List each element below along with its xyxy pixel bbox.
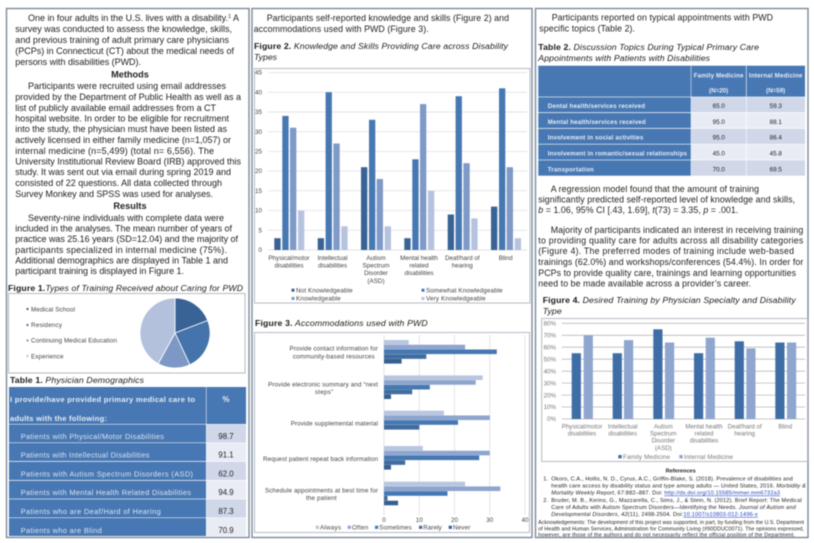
y axis labels: 45	[255, 70, 262, 76]
text block: introduction: 1	[228, 14, 231, 20]
heading: figure 4: Figure 4. Desired Training by Physician Specialty and Disability	[543, 295, 796, 305]
x axis category labels: Physical/motor	[268, 255, 310, 262]
table 2: discussion topics: 59.3	[770, 103, 782, 110]
table 2: discussion topics: Involvement in social activities	[548, 135, 644, 142]
table 2: discussion topics: (N=20)	[709, 88, 728, 94]
category labels: Request patient repeat back information	[263, 456, 378, 463]
x axis category labels: Autism	[654, 423, 673, 430]
bars: provide contact information	[384, 340, 497, 364]
text block: knowledge and accommodations intro	[254, 13, 509, 34]
legend: frequency: Sometimes	[379, 525, 412, 532]
text block: references	[543, 476, 806, 518]
category labels: Provide electronic summary and “next	[268, 382, 378, 388]
text block: methods: study. It was sent out via email during spring 2019 and	[15, 167, 231, 177]
x axis category labels: related	[409, 262, 429, 270]
bars: somewhat knowledgeable	[282, 88, 505, 250]
legend: training types: Medical School	[31, 306, 75, 313]
x axis category labels	[562, 423, 793, 452]
x axis labels: 0	[382, 517, 386, 524]
table 1: physician demographics: 94.9	[218, 488, 234, 497]
table 2: discussion topics: 86.4	[770, 135, 782, 142]
heading: figure 3: Figure 3. Accommodations used with PWD	[255, 318, 428, 328]
panel: middle column	[252, 8, 532, 538]
text block: knowledge and accommodations intro: accommodations used with PWD (Figure 3).	[254, 24, 429, 34]
text block: methods	[15, 81, 241, 199]
chart: figure 4 grouped bars	[542, 318, 808, 462]
y axis labels: 60%	[544, 344, 556, 351]
text block: methods: internal medicine (n=5,499) (total n= 6,556). The	[15, 146, 214, 156]
category labels: steps”	[315, 389, 333, 396]
x axis labels: 40	[521, 517, 529, 524]
table 2: discussion topics: (N=59)	[766, 88, 785, 94]
text block: results: practice was 25.16 years (SD=12.04) and the majority of	[15, 234, 238, 244]
table 1: physician demographics: 62.0	[218, 470, 234, 478]
table 2: discussion topics: Transportation	[548, 167, 594, 174]
y axis labels: 40	[255, 89, 262, 96]
table 2: discussion topics: Involvement in romantic/sexual relationships	[548, 151, 688, 158]
x axis category labels: hearing	[452, 262, 473, 270]
text block: references: Bruder, M. B., Kerins, G., Mazzarella, C., Sims, J., & Stein, N. (2012). Brief Report: The Medical	[551, 498, 802, 504]
text block: introduction: survey was conducted to assess the knowledge, skills,	[15, 24, 232, 34]
y axis labels: 80%	[544, 320, 556, 328]
y axis labels	[255, 70, 262, 254]
y axis labels: 20	[255, 168, 262, 175]
text block: preferred training: Majority of participants indicated an interest in receiving training	[551, 225, 803, 235]
x axis category labels: disabilities	[568, 431, 596, 438]
text block: methods: Survey Monkey and SPSS was used for analyses.	[15, 189, 213, 199]
heading: figure 1: Figure 1.Types of Training Received about Caring for PWD	[8, 283, 243, 293]
table 2: discussion topics: Family Medicine	[694, 72, 744, 80]
text block: introduction: and previous training of adult primary care physicians	[15, 35, 229, 45]
text block: introduction: A	[231, 13, 239, 23]
x axis category labels: disabilities	[404, 270, 434, 277]
x axis labels: 20	[451, 517, 458, 524]
legend: training types: Experience	[31, 354, 64, 360]
category labels: Schedule appointments at best time for	[265, 488, 378, 494]
heading: table 2: Appointments with Patients with Disabilities	[537, 53, 711, 63]
text block: methods: provided by the Department of Public Health as well as a	[15, 92, 241, 102]
panel: right column	[536, 8, 808, 539]
text block: results	[15, 213, 238, 276]
x axis category labels: Intellectual	[317, 255, 348, 262]
legend: specialty: Family Medicine	[623, 454, 671, 461]
table 1: physician demographics: I provide/have provided primary medical care to	[10, 395, 195, 404]
text block: preferred training: PCPs to provide quality care, trainings and learning opportunities	[538, 268, 797, 278]
table 1: physician demographics: Patients with Intellectual Disabilities	[21, 450, 150, 460]
heading: figure 4	[543, 295, 796, 316]
table 2: discussion topics: 69.5	[770, 167, 782, 174]
x axis labels	[382, 517, 529, 524]
legend: specialty	[618, 454, 734, 461]
legend: frequency: Never	[453, 525, 470, 532]
table 1: physician demographics: %	[223, 395, 230, 404]
text block: introduction: persons with disabilities (PWD).	[15, 57, 141, 67]
text block: references: Okoro, C.A., Hollis, N. D., Cyrus, A.C., Griffin-Blake, S. (2018). Prevalence of disabilities and	[551, 476, 793, 482]
text block: methods: hospital website. In order to be eligible for recruitment	[15, 114, 229, 124]
heading: figure 2: Figure 2. Knowledge and Skills Providing Care across Disability	[254, 41, 509, 51]
text block: methods: into the study, the physician must have been listed as	[15, 124, 227, 134]
y axis labels: 35	[255, 109, 262, 116]
text block: introduction: (PCPs) in Connecticut (CT) about the medical needs of	[15, 46, 234, 56]
x axis category labels: Spectrum	[650, 431, 677, 438]
text block: preferred training: need to be made available across a provider’s career.	[538, 278, 751, 288]
bars: not knowledgeable	[274, 167, 497, 250]
legend: knowledge levels: Not Knowledgeable	[296, 288, 353, 294]
y axis labels: 0%	[547, 416, 556, 423]
heading: results: Results	[113, 201, 147, 211]
bars: request patient repeat back	[384, 446, 490, 470]
panel: left column	[6, 8, 249, 538]
text block: methods: list of publicly available email addresses from a CT	[15, 103, 216, 113]
text block: methods: Participants were recruited using email addresses	[28, 81, 226, 91]
table 1: physician demographics: 87.3	[218, 507, 234, 516]
y axis labels: 50%	[544, 356, 556, 363]
table 1: physician demographics: 70.9	[218, 526, 234, 535]
text block: regression: significantly predicted self-reported level of knowledge and skills,	[538, 194, 795, 204]
x axis category labels	[268, 255, 513, 285]
table 1: physician demographics: Patients who are Blind	[21, 526, 102, 535]
x axis category labels: Blind	[499, 255, 513, 262]
heading: figure 4: Type	[543, 306, 562, 316]
text block: results: participant training is displayed in Figure 1.	[15, 266, 184, 276]
table 2: discussion topics	[538, 66, 805, 176]
legend: frequency: Often	[352, 525, 369, 532]
x axis category labels: disabilities	[274, 262, 304, 270]
x axis category labels: Autism	[366, 255, 386, 262]
x axis category labels: Physical/motor	[562, 423, 602, 430]
table 1: physician demographics: 91.1	[218, 450, 234, 460]
y axis labels: 15	[255, 188, 262, 195]
table 2: discussion topics: Internal Medicine	[749, 72, 803, 80]
text block: regression: A regression model found that the amount of training	[551, 184, 759, 194]
x axis category labels: Disorder	[652, 438, 675, 445]
table 2: discussion topics: 45.8	[770, 151, 782, 158]
legend: training types: Continuing Medical Education	[31, 338, 117, 345]
legend: training types	[26, 306, 117, 360]
text block: results: participants specialized in internal medicine (75%).	[15, 245, 227, 255]
x axis category labels: Intellectual	[608, 423, 637, 430]
y axis labels: 30	[255, 129, 262, 136]
legend: specialty: Internal Medicine	[684, 454, 734, 461]
heading: table 1: Table 1. Physician Demographics	[10, 375, 145, 385]
chart: figure 1 pie chart	[8, 294, 245, 373]
heading: figure 2: Types	[254, 52, 278, 62]
heading: table 2: Table 2. Discussion Topics During Typical Primary Care	[538, 42, 759, 52]
y axis labels: 40%	[544, 368, 556, 375]
heading: table 2	[537, 42, 759, 63]
x axis category labels: Disorder	[364, 270, 388, 277]
bars: internal medicine	[584, 335, 796, 419]
x axis category labels: Mental health	[400, 255, 438, 262]
y axis labels: 10%	[544, 404, 556, 411]
category labels: Provide supplemental material	[291, 420, 378, 428]
x axis category labels: disabilities	[318, 262, 347, 270]
table 2: discussion topics: 95.0	[713, 135, 725, 142]
table 2: discussion topics: Mental health/services received	[548, 119, 646, 126]
x axis category labels: related	[695, 431, 714, 438]
table 2: discussion topics: 65.0	[713, 103, 725, 110]
text block: acknowledgements: however, are those of the authors and do not necessarily reflect the official position of the Department.	[538, 533, 795, 539]
table 1: physician demographics: Patients with Physical/Motor Disabilities	[21, 432, 164, 441]
text block: references: health care access by disability status and type among adults — United States, 2016. Morbidity &	[551, 484, 806, 490]
text block: results: Additional demographics are displayed in Table 1 and	[15, 256, 228, 266]
text block: references: Developmental Disorders, 42(11), 2498-2504. Doi:10.1007/s10803-012-1496-x	[551, 512, 758, 518]
y axis labels: 10	[255, 208, 262, 215]
table 2: discussion topics: 45.0	[713, 151, 725, 158]
legend: knowledge levels	[292, 288, 503, 303]
legend: knowledge levels: Very Knowledgeable	[426, 296, 486, 303]
text block: references: 1.	[543, 476, 548, 482]
x axis category labels: Deaf/hard of	[728, 423, 762, 430]
x axis category labels: (ASD)	[655, 445, 672, 452]
bars: provide supplemental material	[384, 411, 490, 430]
x axis category labels: disabilities	[608, 431, 637, 438]
text block: introduction	[15, 13, 239, 67]
text block: preferred training: to providing quality care for adults across all disability categories	[538, 235, 804, 245]
text block: knowledge and accommodations intro: Participants self-reported knowledge and skills (Figure 2) and	[267, 13, 509, 23]
x axis category labels: disabilities	[690, 438, 718, 445]
category labels: Provide contact information for	[290, 346, 378, 352]
text block: preferred training	[538, 225, 804, 288]
text block: preferred training: (Figure 4). The preferred modes of training include web-based	[538, 246, 794, 256]
y axis labels: 5	[258, 227, 262, 234]
legend: frequency	[316, 525, 470, 532]
table 1: physician demographics: Patients who are Deaf/Hard of Hearing	[21, 507, 161, 516]
heading: references: References	[666, 468, 696, 474]
y axis labels: 0	[258, 247, 262, 254]
text block: methods: actively licensed in either family medicine (n=1,057) or	[15, 135, 231, 145]
y axis labels: 25	[255, 148, 262, 156]
table 2: discussion topics: 95.0	[713, 119, 725, 126]
pie slices	[140, 298, 210, 368]
category labels	[263, 346, 378, 502]
heading: methods: Methods	[111, 70, 149, 80]
text block: references: Care of Adults with Autism Spectrum Disorders—Identifying the Needs. Journal of Autism and	[551, 505, 797, 511]
table 1: physician demographics: Patients with Mental Health Related Disabilities	[21, 488, 191, 497]
bars: knowledgeable	[290, 104, 513, 250]
x axis labels: 10	[416, 517, 423, 524]
chart: figure 3 horizontal bars	[254, 332, 530, 532]
y axis labels: 20%	[544, 392, 556, 399]
text block: results: included in the analyses. The mean number of years of	[15, 224, 232, 234]
text block: acknowledgements: of Health and Human Services, Administration for Community Living (#90DDUC0071). The opinions expressed,	[538, 527, 804, 533]
text block: acknowledgements: Acknowledgements: The development of this project was supported, in part, by funding from the U.S. Department	[538, 520, 805, 526]
table 2: discussion topics: 70.0	[713, 167, 725, 174]
y axis labels	[544, 320, 556, 423]
y axis labels: 70%	[544, 332, 556, 340]
category labels: community-based resources	[293, 354, 375, 360]
table 1: physician demographics: adults with the following:	[10, 414, 107, 423]
x axis category labels: Blind	[778, 423, 793, 430]
x axis category labels: Deaf/hard of	[445, 255, 480, 262]
table 1: physician demographics: 98.7	[218, 432, 234, 441]
heading: figure 2	[254, 41, 509, 62]
text block: references: Mortality Weekly Report, 67:882–887. Doi: http://dx.doi.org/10.15585/mmwr.mm6732a3	[551, 490, 780, 496]
text block: preferred training: trainings (62.0%) and workshops/conferences (54.4%). In order for	[538, 257, 803, 267]
text block: regression: b = 1.06, 95% CI [.43, 1.69], t(73) = 3.35, p = .001.	[538, 205, 738, 215]
x axis labels: 30	[486, 517, 494, 524]
bars: schedule appointments	[384, 482, 500, 505]
x axis category labels: (ASD)	[367, 278, 385, 285]
table 2: discussion topics: 88.1	[770, 119, 782, 126]
text block: introduction: One in four adults in the U.S. lives with a disability.	[28, 13, 228, 23]
text block: results: Seventy-nine individuals with complete data were	[28, 213, 224, 223]
text block: methods: University Institutional Review Board (IRB) approved this	[15, 156, 241, 166]
text block: appointments intro	[539, 12, 773, 34]
bars: provide electronic summary	[384, 375, 483, 399]
text block: acknowledgements	[538, 520, 805, 539]
category labels: the patient	[306, 495, 337, 502]
legend: knowledge levels: Somewhat Knowledgeable	[426, 288, 503, 294]
legend: training types: Residency	[31, 322, 63, 329]
legend: frequency: Rarely	[423, 525, 443, 532]
x axis category labels: Spectrum	[363, 262, 389, 270]
text block: methods: consisted of 22 questions. All data collected through	[15, 178, 222, 188]
bars: very knowledgeable	[298, 191, 521, 250]
table 1: physician demographics	[9, 387, 246, 536]
table 1: physician demographics: Patients with Autism Spectrum Disorders (ASD)	[21, 470, 193, 478]
x axis category labels: Mental health	[685, 423, 723, 430]
text block: regression	[538, 184, 795, 215]
bars: family medicine	[572, 329, 784, 419]
text block: references: 2.	[543, 498, 548, 504]
legend: frequency: Always	[320, 525, 341, 532]
chart: figure 2 grouped bars	[254, 68, 530, 303]
text block: appointments intro: specific topics (Table 2).	[539, 24, 635, 34]
legend: knowledge levels: Knowledgeable	[296, 296, 341, 303]
y axis labels: 30%	[544, 380, 556, 387]
text block: appointments intro: Participants reported on typical appointments with PWD	[552, 12, 773, 22]
table 2: discussion topics: Dental health/services received	[548, 103, 645, 110]
x axis category labels: hearing	[734, 431, 756, 438]
